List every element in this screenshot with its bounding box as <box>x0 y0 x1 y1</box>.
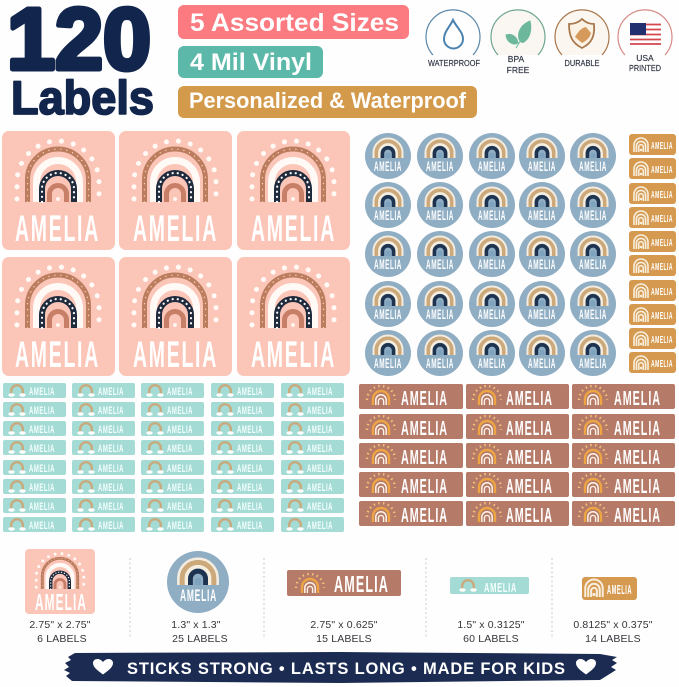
size key: mint 1.5 x 0.3125: 60 LABELS <box>463 633 519 645</box>
round label row 4: AMELIA <box>528 306 556 322</box>
brown label row 2: AMELIA <box>401 418 448 440</box>
badge: BPA free <box>491 10 545 75</box>
badge: waterproof <box>426 10 480 68</box>
mint label row 1 <box>3 383 344 398</box>
round label row 3: AMELIA <box>528 256 556 272</box>
mint label row 6: AMELIA <box>98 482 124 494</box>
mint label row 7: AMELIA <box>307 501 333 513</box>
round label row 5: AMELIA <box>478 355 506 371</box>
size key: square 2.75 x 2.75: AMELIA <box>35 589 87 615</box>
size key: round 1.3 x 1.3: AMELIA <box>180 586 217 605</box>
round label row 3: AMELIA <box>579 256 607 272</box>
round label row 4 <box>365 281 616 327</box>
size key: orange 0.8125 x 0.375: AMELIA <box>607 583 632 597</box>
size key: round 1.3 x 1.3 <box>167 551 229 645</box>
brown label row 4: AMELIA <box>401 476 448 498</box>
mint label row 5: AMELIA <box>29 463 55 475</box>
mint label row 1: AMELIA <box>237 386 263 398</box>
mint label row 5: AMELIA <box>167 463 193 475</box>
mint label row 3 <box>3 421 344 436</box>
mint label row 2: AMELIA <box>29 405 55 417</box>
mint label row 7: AMELIA <box>237 501 263 513</box>
square label row 1: AMELIA <box>15 208 100 249</box>
round label row 3: AMELIA <box>426 256 454 272</box>
mint label row 7: AMELIA <box>29 501 55 513</box>
mint label row 1: AMELIA <box>167 386 193 398</box>
mint label row 8: AMELIA <box>98 520 124 532</box>
icon: water drop <box>444 20 463 48</box>
square label row 1: AMELIA <box>251 208 336 249</box>
icon: leaves <box>506 21 531 48</box>
mint label row 2 <box>3 402 344 417</box>
size key: mint 1.5 x 0.3125 <box>450 577 529 645</box>
mint label row 3: AMELIA <box>307 424 333 436</box>
icon: US flag <box>630 23 661 45</box>
pill: 4 Mil Vinyl: 4 Mil Vinyl <box>190 49 312 76</box>
badge: USA printed: PRINTED <box>629 63 661 73</box>
mint label row 5 <box>3 460 344 475</box>
mint label row 5: AMELIA <box>98 463 124 475</box>
size key: square 2.75 x 2.75 <box>25 549 95 645</box>
size key: brown 2.75 x 0.625 <box>287 570 401 645</box>
mint label row 3: AMELIA <box>237 424 263 436</box>
round label row 2 <box>365 182 616 228</box>
mint label row 2: AMELIA <box>98 405 124 417</box>
pill: 5 Assorted Sizes: 5 Assorted Sizes <box>190 9 399 37</box>
mint label row 3: AMELIA <box>29 424 55 436</box>
brown label row 2: AMELIA <box>506 418 553 440</box>
round label row 1 <box>365 133 616 179</box>
mint label row 7: AMELIA <box>98 501 124 513</box>
round label row 2: AMELIA <box>374 207 402 223</box>
square label row 1: AMELIA <box>133 208 218 249</box>
mint label row 6: AMELIA <box>237 482 263 494</box>
mint label row 7: AMELIA <box>167 501 193 513</box>
badge: durable <box>555 10 609 68</box>
mint label row 3: AMELIA <box>98 424 124 436</box>
mint label row 8: AMELIA <box>307 520 333 532</box>
banner: sticks strong: STICKS STRONG • LASTS LONG • MADE FOR KIDS <box>127 660 565 678</box>
square label row 2: AMELIA <box>15 334 100 375</box>
mint label row 7 <box>3 498 344 513</box>
mint label row 6: AMELIA <box>307 482 333 494</box>
sheet: 2.75 x 0.625 brown labels <box>359 384 675 527</box>
round label row 1: AMELIA <box>579 158 607 174</box>
brown label row 4: AMELIA <box>506 476 553 498</box>
round label row 2: AMELIA <box>528 207 556 223</box>
mint label row 8: AMELIA <box>237 520 263 532</box>
round label row 5: AMELIA <box>579 355 607 371</box>
square label row 2: AMELIA <box>133 334 218 375</box>
brown label row 3 <box>359 443 675 469</box>
sheet: 0.8125 x 0.375 orange labels <box>629 134 676 373</box>
round label row 5: AMELIA <box>528 355 556 371</box>
size key: orange 0.8125 x 0.375: 14 LABELS <box>585 633 641 645</box>
size key: mint 1.5 x 0.3125: AMELIA <box>484 581 517 595</box>
badge: USA printed <box>618 10 672 73</box>
round label row 3: AMELIA <box>374 256 402 272</box>
round label row 5: AMELIA <box>426 355 454 371</box>
brown label row 2 <box>359 414 675 440</box>
icon: shield <box>569 19 594 48</box>
size key: square 2.75 x 2.75: 2.75" x 2.75" <box>29 619 91 631</box>
round label row 1: AMELIA <box>478 158 506 174</box>
round label row 4: AMELIA <box>478 306 506 322</box>
mint label row 2: AMELIA <box>237 405 263 417</box>
badge: BPA free: FREE <box>507 65 530 75</box>
round label row 4: AMELIA <box>579 306 607 322</box>
mint label row 4: AMELIA <box>29 443 55 455</box>
round label row 1: AMELIA <box>528 158 556 174</box>
mint label row 1: AMELIA <box>307 386 333 398</box>
mint label row 6: AMELIA <box>29 482 55 494</box>
round label row 1: AMELIA <box>426 158 454 174</box>
mint label row 1: AMELIA <box>98 386 124 398</box>
mint label row 2: AMELIA <box>167 405 193 417</box>
brown label row 1 <box>359 384 675 410</box>
round label row 2: AMELIA <box>579 207 607 223</box>
mint label row 6 <box>3 479 344 494</box>
brown label row 5 <box>359 501 675 527</box>
mint label row 6: AMELIA <box>167 482 193 494</box>
round label row 5: AMELIA <box>374 355 402 371</box>
pill: 4 Mil Vinyl <box>178 46 323 78</box>
brown label row 3: AMELIA <box>401 447 448 469</box>
title: 120 Labels: Labels <box>11 71 154 124</box>
sheet: 2.75 x 2.75 square labels <box>2 131 350 376</box>
square label row 1 <box>2 131 350 250</box>
mint label row 2: AMELIA <box>307 405 333 417</box>
banner: sticks strong <box>64 652 617 683</box>
mint label row 8: AMELIA <box>29 520 55 532</box>
sheet: 1.5 x 0.3125 mint labels <box>3 383 344 532</box>
round label row 4: AMELIA <box>374 306 402 322</box>
mint label row 4: AMELIA <box>98 443 124 455</box>
size key: orange 0.8125 x 0.375 <box>573 577 653 645</box>
round label row 3 <box>365 231 616 277</box>
badge: USA printed: USA <box>636 53 654 63</box>
size key: round 1.3 x 1.3: 1.3" x 1.3" <box>171 619 221 631</box>
brown label row 1: AMELIA <box>506 388 553 410</box>
badge: waterproof: WATERPROOF <box>428 58 480 68</box>
brown label row 3: AMELIA <box>506 447 553 469</box>
mint label row 8: AMELIA <box>167 520 193 532</box>
round label row 2: AMELIA <box>426 207 454 223</box>
badge: durable: DURABLE <box>564 58 600 68</box>
icon: heart right <box>576 659 596 674</box>
mint label row 8 <box>3 517 344 532</box>
round label row 5 <box>365 330 616 376</box>
square label row 2 <box>2 257 350 376</box>
sheet: 1.3 x 1.3 round labels <box>365 133 616 376</box>
pill: Personalized & Waterproof: Personalized & Waterproof <box>189 88 467 113</box>
round label row 4: AMELIA <box>426 306 454 322</box>
size key: round 1.3 x 1.3: 25 LABELS <box>172 633 228 645</box>
brown label row 4 <box>359 472 675 498</box>
round label row 2: AMELIA <box>478 207 506 223</box>
brown label row 1: AMELIA <box>401 388 448 410</box>
round label row 1: AMELIA <box>374 158 402 174</box>
size key: brown 2.75 x 0.625: AMELIA <box>334 571 389 597</box>
size key: mint 1.5 x 0.3125: 1.5" x 0.3125" <box>457 619 525 631</box>
size key: square 2.75 x 2.75: 6 LABELS <box>37 633 87 645</box>
mint label row 1: AMELIA <box>29 386 55 398</box>
mint label row 4 <box>3 440 344 455</box>
icon: heart left <box>93 659 113 674</box>
mint label row 5: AMELIA <box>237 463 263 475</box>
mint label row 4: AMELIA <box>167 443 193 455</box>
mint label row 3: AMELIA <box>167 424 193 436</box>
square label row 2: AMELIA <box>251 334 336 375</box>
brown label row 5: AMELIA <box>506 505 553 527</box>
mint label row 4: AMELIA <box>307 443 333 455</box>
round label row 3: AMELIA <box>478 256 506 272</box>
size key: brown 2.75 x 0.625: 15 LABELS <box>316 633 372 645</box>
size key: orange 0.8125 x 0.375: 0.8125" x 0.375" <box>573 619 653 631</box>
badge: BPA free: BPA <box>508 54 525 64</box>
mint label row 5: AMELIA <box>307 463 333 475</box>
mint label row 4: AMELIA <box>237 443 263 455</box>
brown label row 5: AMELIA <box>401 505 448 527</box>
size key: brown 2.75 x 0.625: 2.75" x 0.625" <box>310 619 378 631</box>
